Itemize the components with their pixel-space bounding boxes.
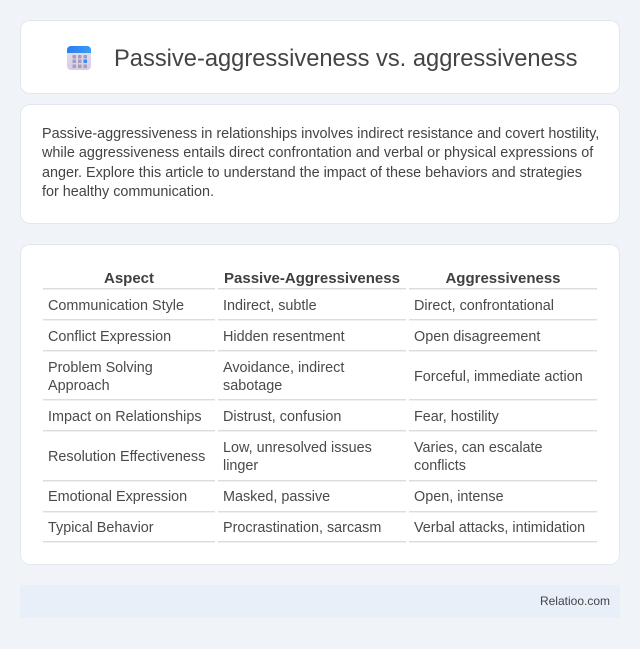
row: problem solving approach: Avoidance, indirect	[223, 360, 344, 376]
row: communication style	[48, 298, 554, 314]
row: problem solving approach: Problem Solving	[48, 360, 153, 376]
row: communication style: Direct, confrontational	[414, 298, 554, 314]
row: impact on relationships: Impact on Relationships	[48, 409, 202, 425]
icon: calendar	[67, 46, 91, 70]
table header: Aggressiveness	[445, 270, 561, 287]
row: typical behavior	[48, 520, 585, 536]
row: impact on relationships: Fear, hostility	[414, 409, 499, 425]
intro paragraph: while aggressiveness entails direct confrontation and verbal or physical expressions of	[42, 145, 593, 161]
row: typical behavior: Verbal attacks, intimidation	[414, 520, 585, 536]
row: conflict expression	[48, 329, 540, 345]
row: resolution effectiveness: linger	[223, 458, 258, 474]
row: problem solving approach: sabotage	[223, 378, 282, 394]
footer text: Relatioo.com	[540, 594, 610, 608]
row: resolution effectiveness: Resolution Effectiveness	[48, 449, 205, 465]
intro paragraph: anger. Explore this article to understand the impact of these behaviors and strategies	[42, 165, 582, 181]
row: typical behavior: Typical Behavior	[48, 520, 154, 536]
row: problem solving approach	[48, 360, 583, 394]
panel: intro text	[20, 104, 620, 224]
row: resolution effectiveness	[48, 440, 543, 474]
row: emotional expression: Open, intense	[414, 489, 504, 505]
row: resolution effectiveness: conflicts	[414, 458, 466, 474]
row: problem solving approach: Forceful, immediate action	[414, 369, 583, 385]
comparison table	[43, 270, 597, 543]
row: communication style: Communication Style	[48, 298, 184, 314]
footer bar	[20, 585, 620, 618]
row: typical behavior: Procrastination, sarcasm	[223, 520, 381, 536]
row: conflict expression: Open disagreement	[414, 329, 540, 345]
row: emotional expression: Emotional Expression	[48, 489, 187, 505]
row: resolution effectiveness: Low, unresolved issues	[223, 440, 372, 456]
intro paragraph	[42, 126, 599, 200]
panel: title card	[20, 20, 620, 94]
intro paragraph: Passive-aggressiveness in relationships involves indirect resistance and covert hostility,	[42, 126, 599, 142]
row: conflict expression: Conflict Expression	[48, 329, 171, 345]
row: communication style: Indirect, subtle	[223, 298, 317, 314]
row: emotional expression	[48, 489, 504, 505]
panel: comparison table	[20, 244, 620, 565]
row: problem solving approach: Approach	[48, 378, 110, 394]
row: impact on relationships	[48, 409, 499, 425]
table header: Aspect	[104, 270, 154, 287]
intro paragraph: for healthy communication.	[42, 184, 214, 200]
row: conflict expression: Hidden resentment	[223, 329, 345, 345]
table header: Passive-Aggressiveness	[224, 270, 400, 287]
row: resolution effectiveness: Varies, can escalate	[414, 440, 543, 456]
title: Passive-aggressiveness vs. aggressiveness	[114, 46, 577, 72]
row: impact on relationships: Distrust, confusion	[223, 409, 341, 425]
table header	[104, 270, 561, 287]
row: emotional expression: Masked, passive	[223, 489, 330, 505]
